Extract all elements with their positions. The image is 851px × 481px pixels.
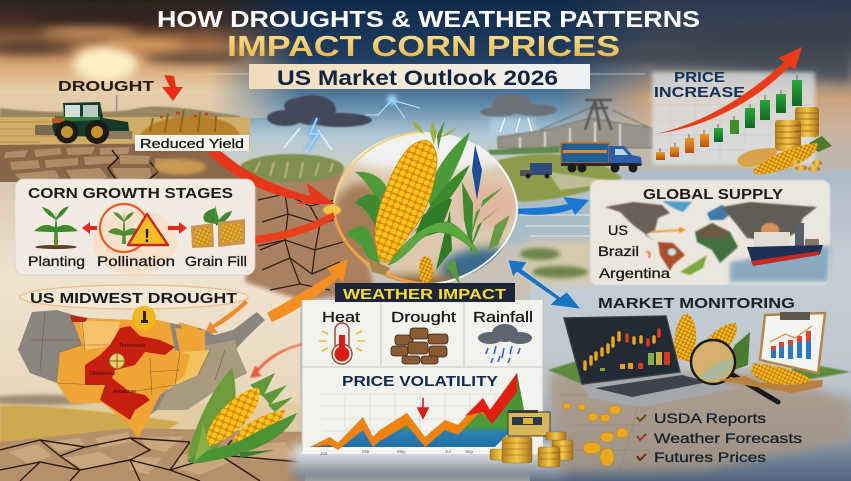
coins and corn [737,107,832,174]
panel: corn growth stages [15,179,255,275]
small truck [520,163,552,178]
us midwest drought label [20,285,248,309]
road [548,172,622,190]
heat column: Heat [322,310,360,326]
item: futures prices [637,449,766,465]
supply labels: Argentina [599,265,670,281]
red patches [85,326,175,420]
lower cracked ground [0,395,305,481]
item: futures prices: Futures Prices [654,449,766,465]
arrow: corn to global supply [513,197,589,215]
green and blue area [310,373,525,447]
world map [605,201,830,282]
price volatility chart: Sep [465,449,474,454]
price volatility chart: Mar [362,449,370,454]
arrow: double blue [508,260,581,309]
river and sand right of circle [505,200,595,245]
central corn circle [322,120,518,283]
drought label [58,75,183,101]
drought label: DROUGHT [58,78,154,95]
circle interior [334,132,516,283]
blue truck [561,143,642,172]
green crop patch [240,154,344,182]
title: IMPACT CORN PRICES [227,31,620,63]
clipboard chart [760,312,825,373]
title: HOW DROUGHTS & WEATHER PATTERNS [157,6,700,32]
corn cobs behind [674,313,750,375]
subtitle banner [208,64,645,90]
icon: thermometer [319,323,365,364]
corn tassels [412,120,460,150]
arrow: map to corn [267,259,348,322]
icon: red down arrow [162,75,183,101]
base outline [18,310,265,438]
laptop with chart [564,316,738,407]
east dry land [157,340,247,410]
arrow: price increase [655,47,802,134]
arrow: drought to corn [207,152,335,204]
small corn [419,256,433,284]
band below weather panel [292,445,564,481]
price volatility chart [310,373,525,456]
field and cracked earth, upper left [0,107,260,182]
cargo ship [747,223,823,266]
heat column [319,310,365,364]
right side plants [436,182,510,285]
icon: map pin top [132,306,156,330]
mid cracked earth [225,170,375,300]
reduced yield label [135,135,249,151]
price volatility chart: Jul [445,449,451,454]
rainfall column [473,310,533,363]
stage labels: Planting [28,253,85,269]
panel: price increase [652,72,815,165]
red peak [465,373,517,424]
price volatility chart: May [397,449,406,454]
price volatility chart: Jan [320,451,328,456]
corn ear illustration [187,368,297,463]
supply labels: Brazil [598,243,639,259]
price increase heading: INCREASE [654,84,745,101]
drought column [391,310,456,364]
market monitoring heading: MARKET MONITORING [598,295,795,312]
city labels [90,343,146,395]
blue leaf [472,145,482,200]
arrow: label to map [205,300,248,333]
item: usda reports: USDA Reports [654,410,766,426]
wood table under market scene [548,372,851,472]
title [157,6,700,63]
icon: warning triangle: ! [144,226,150,246]
husk base [368,258,390,275]
storm cloud right [480,94,557,134]
grain elevator [488,100,652,155]
subtitle banner: US Market Outlook 2026 [277,66,558,90]
magnifying glass [691,340,778,402]
orange belt [57,318,190,438]
storm cloud and lightning left [267,95,420,152]
shrubs [520,248,588,278]
supply labels: US [608,222,628,238]
stage labels [28,253,247,269]
panel: weather impact [302,283,543,454]
corn tray [718,363,823,393]
arrow: lower orange feeder [255,212,335,244]
stage icon: planting [34,206,78,249]
stage arrows [82,222,187,234]
icon: dry soil clumps [391,328,448,364]
storm clouds right [560,12,851,82]
price volatility chart: PRICE VOLATILITY [342,373,498,390]
stage labels: Grain Fill [185,253,247,269]
drought column: Drought [391,310,456,326]
item: weather forecasts: Weather Forecasts [654,430,802,446]
price increase heading: PRICE [674,69,725,86]
foliage behind laptop [548,360,851,385]
left leaves [345,172,388,264]
tall leaves [410,132,470,240]
stage icon: grain fill [191,205,245,248]
city labels: Arkansas [113,389,136,395]
heading: GLOBAL SUPPLY [643,186,783,203]
icon: rain cloud [478,324,532,363]
rainfall column: Rainfall [473,310,533,326]
icon: map pin center [110,354,124,368]
heading tag: WEATHER IMPACT [343,287,506,303]
checklist [637,410,802,465]
state lines [30,312,225,403]
orange band [310,380,512,450]
candles [656,75,802,160]
coin pile and truck [490,410,573,467]
arrow: red swoosh [250,343,304,378]
sun glow [73,46,137,82]
tractor illustration [35,95,132,144]
stage labels: Pollination [97,253,175,269]
panel: global supply [590,180,830,285]
front leaf [388,222,480,265]
city labels: Tennessee [119,343,146,349]
us drought map [18,306,265,438]
heading tag [335,283,515,303]
stage icon: pollination highlight [93,204,177,275]
price increase heading [654,69,745,101]
us midwest drought label: US MIDWEST DROUGHT [30,291,237,307]
green hill [498,154,622,202]
supply labels [598,222,670,281]
heading: CORN GROWTH STAGES [28,186,233,202]
map water tint [730,245,830,282]
city labels: Oklahoma [90,371,116,377]
scattered kernels [563,403,628,466]
corn cob [375,140,437,263]
reduced yield label: Reduced Yield [140,136,244,151]
